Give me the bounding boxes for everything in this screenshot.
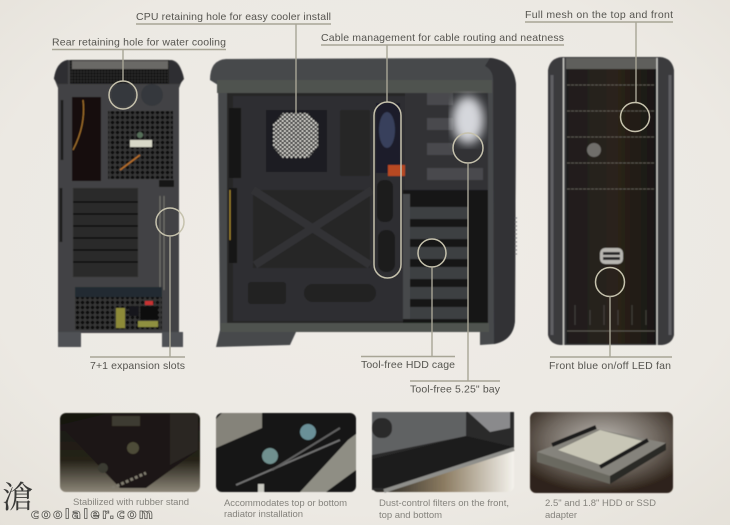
callout: cable management: Cable management for cable routing and neatness <box>321 32 564 44</box>
watermark: coolaler.com <box>31 506 153 522</box>
callout: front fan <box>549 268 672 372</box>
callout: cpu retaining hole <box>136 11 331 113</box>
callout: hdd cage: Tool-free HDD cage <box>361 359 455 371</box>
thumbnail: radiator <box>216 413 356 520</box>
caption: rubber stand: Stabilized with rubber stand <box>73 497 189 508</box>
callout: expansion slots: 7+1 expansion slots <box>90 360 185 372</box>
callout: expansion slots <box>90 208 185 372</box>
caption: dust filters: Dust-control filters on the front, <box>379 498 509 509</box>
callout: 5.25 bay <box>410 133 501 396</box>
callout: front fan: Front blue on/off LED fan <box>549 360 671 372</box>
rear view of case <box>54 60 184 347</box>
thumbnail: ssd adapter <box>530 412 673 521</box>
callout: cpu retaining hole: CPU retaining hole for easy cooler install <box>136 11 331 23</box>
front view of case <box>548 57 674 345</box>
thumbnail: ssd adapter: adapter <box>545 510 577 521</box>
callout: rear retaining hole: Rear retaining hole for water cooling <box>52 36 226 48</box>
callout: full mesh <box>525 9 673 132</box>
thumbnail: dust filters <box>372 412 514 521</box>
thumbnail: rubber stand <box>60 413 200 508</box>
thumbnail: dust filters: top and bottom <box>379 510 442 521</box>
callout: cable management <box>321 32 564 278</box>
caption: ssd adapter: 2.5" and 1.8" HDD or SSD <box>545 498 656 509</box>
callout: full mesh: Full mesh on the top and front <box>525 9 673 21</box>
caption: radiator: Accommodates top or bottom <box>224 498 347 509</box>
watermark: 滄 <box>2 480 33 515</box>
thumbnail: radiator: radiator installation <box>224 509 303 520</box>
callout: hdd cage <box>361 239 455 371</box>
callout: rear retaining hole <box>52 36 226 109</box>
callout: 5.25 bay: Tool-free 5.25" bay <box>410 384 501 396</box>
side view of case <box>210 58 517 347</box>
watermark <box>2 480 153 522</box>
